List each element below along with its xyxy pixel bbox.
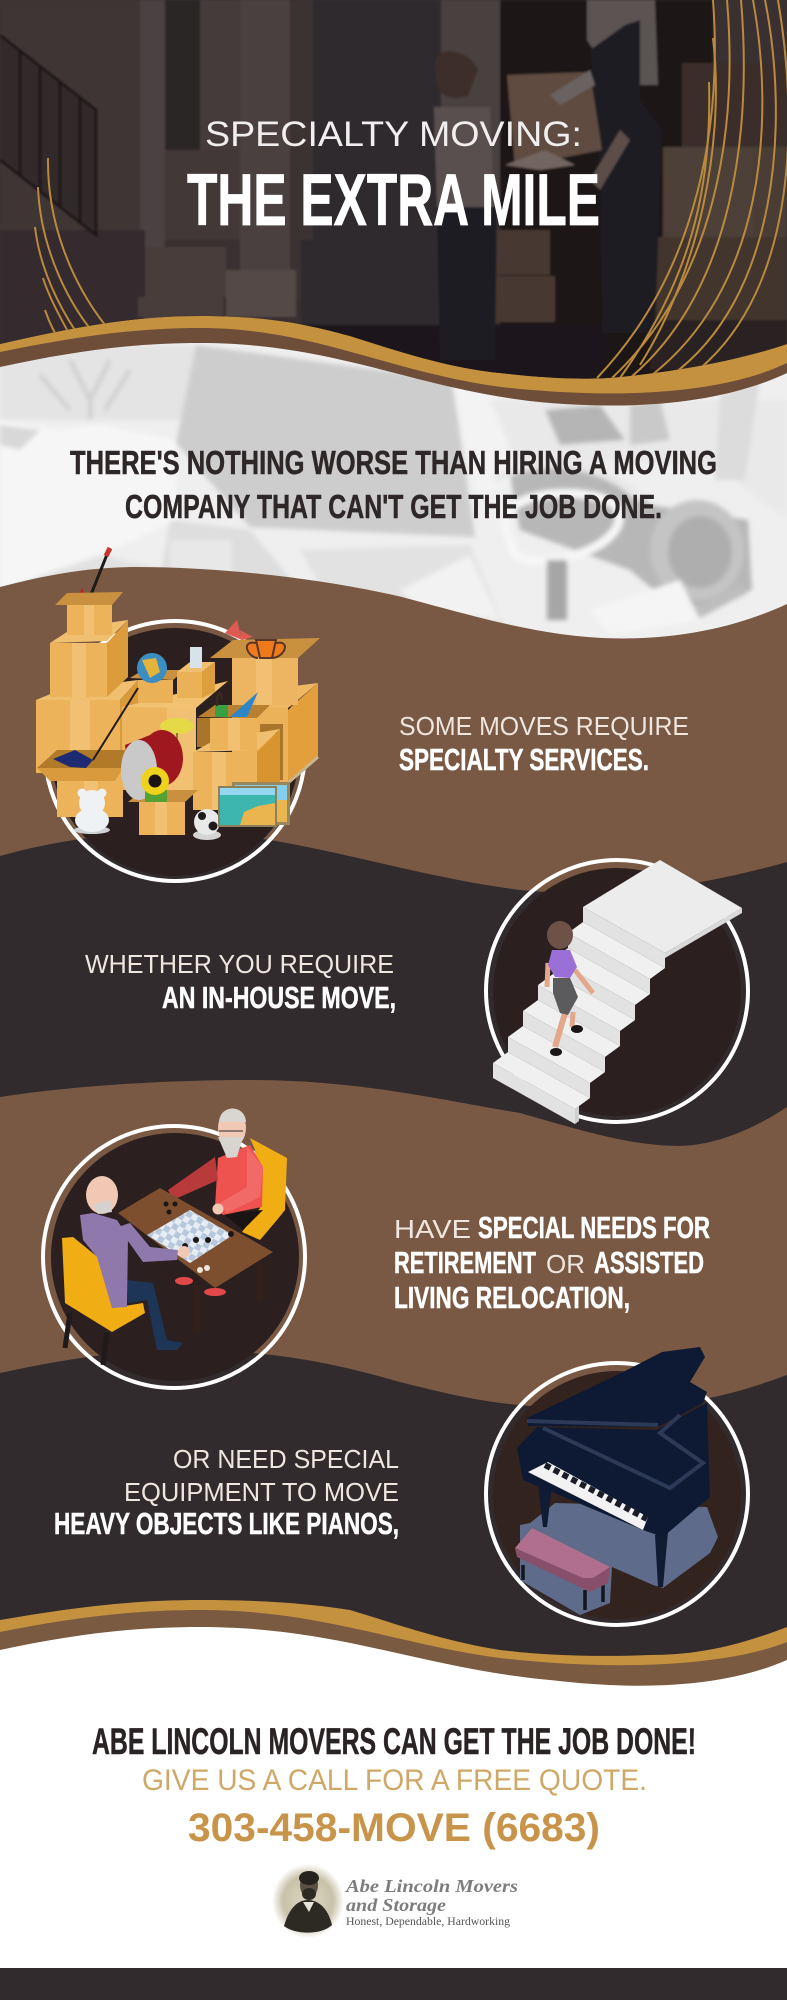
caption: retirement relocation: HAVE [394,1214,471,1244]
company logo [272,1864,518,1938]
illustration: seniors playing chess in circle [43,1108,305,1388]
call to action subline: GIVE US A CALL FOR A FREE QUOTE. [142,1764,647,1797]
circle frame four [486,1363,748,1625]
caption: specialty services: SPECIALTY SERVICES. [399,742,649,777]
middle box [122,707,196,790]
title: THE EXTRA MILE [187,160,600,241]
icon: right chair [242,1138,287,1240]
icon: framed pictures [218,782,290,827]
icon: teddy bear [74,788,110,834]
caption: heavy objects: HEAVY OBJECTS LIKE PIANOS, [54,1506,399,1541]
illustration: staircase in circle [486,860,748,1124]
top open box [67,605,112,635]
caption: specialty services: SOME MOVES REQUIRE [399,711,689,741]
icon: carpet [520,1503,718,1615]
phone number: 303-458-MOVE (6683) [188,1806,600,1850]
icon: white staircase [493,860,742,1124]
icon: drinking glass [190,647,202,668]
circle frame three [43,1126,305,1388]
gold band under footer wave [0,1450,787,1665]
panel: dark wave two [0,832,787,1200]
icon: table and chess board [118,1188,273,1333]
icon: drum [121,730,183,800]
small sunflower box [139,802,185,835]
left upper box [50,643,107,697]
icon: pens and umbrella [215,692,258,717]
panel: grey photo of cluttered belongings [0,340,787,660]
panel: dark wave four [0,1350,787,1656]
lower right box [193,752,257,810]
bottom left open box [57,770,123,817]
icon: graduation cap [53,750,93,768]
caption: in-house move [85,949,396,1015]
decorative gold arcs right [597,0,787,378]
icon: guitar [75,548,110,604]
caption: in-house move: WHETHER YOU REQUIRE [85,949,394,979]
logo wordmark: Abe Lincoln Movers [345,1876,518,1896]
caption: in-house move: AN IN-HOUSE MOVE, [162,980,396,1015]
illustration: grand piano in circle [486,1347,748,1625]
illustration: moving boxes in circle [36,548,320,881]
panel: header photo of movers [0,0,787,400]
icon: trophy [247,640,285,658]
footer bar [0,1968,787,2000]
icon: soccer ball [193,809,221,840]
icon: Abe Lincoln portrait [272,1864,344,1938]
panel: brown wave three [0,1080,787,1500]
intro statement [70,444,717,525]
caption: retirement relocation: OR [546,1249,585,1279]
caption: heavy objects [54,1444,399,1541]
caption: heavy objects: EQUIPMENT TO MOVE [124,1477,399,1507]
icon: left chair [62,1237,145,1365]
logo wordmark: Honest, Dependable, Hardworking [346,1914,510,1928]
icon: piano [517,1347,710,1587]
logo wordmark [345,1876,518,1928]
caption: retirement relocation: LIVING RELOCATION, [394,1280,630,1315]
decorative gold arcs left [35,158,105,345]
gold band under header wave [0,0,787,393]
circle frame two [486,860,748,1122]
pens box [210,718,257,750]
box with trophy [232,658,298,705]
caption: retirement relocation: RETIREMENT [394,1245,536,1280]
panel: brown wave one [0,567,787,1000]
centre boxes [138,680,173,703]
icon: yellow hat [160,718,194,745]
brown band under header wave [0,0,787,406]
logo wordmark: and Storage [346,1895,446,1915]
icon: desk lamp [225,620,253,640]
brown band under footer wave [0,1450,787,1686]
icon: globe [137,653,167,683]
icon: woman climbing stairs [547,921,593,1056]
caption: heavy objects: OR NEED SPECIAL [173,1444,399,1474]
caption: retirement relocation: ASSISTED [594,1245,704,1280]
title: SPECIALTY MOVING: [205,115,582,154]
caption: specialty services [399,711,689,777]
icon: piano bench [515,1528,610,1610]
icon: stacked cardboard boxes [36,592,320,835]
icon: man in purple sweater [80,1176,190,1350]
caption: retirement relocation [394,1210,710,1315]
icon: man in red sweater [158,1108,263,1230]
icon: sunflower [141,767,169,802]
icon: broom handle [93,688,138,760]
big right box [232,706,288,783]
left lower box [36,700,120,773]
circle frame one [45,621,305,881]
title [187,115,600,241]
